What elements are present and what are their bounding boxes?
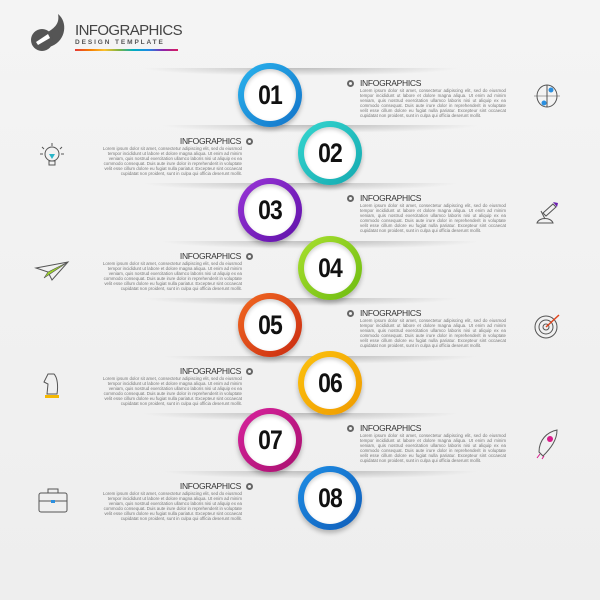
step 07: Lorem ipsum dolor sit amet, consectetur adipiscing elit, sed do eiusmod tempor incididunt ut labore et dolore magna aliqua. Ut enim ad minim veniam, quis nostrud exercitation ullamco laboris nisi ut aliquip ex ea commodo consequat. Duis aute irure dolor in reprehenderit in voluptate velit esse cillum dolore eu fugiat nulla pariatur. Excepteur sint occaecat cupidatat non proident, sunt in culpa qui officia deserunt mollit. [360, 433, 506, 463]
step 07: 07 [258, 425, 282, 455]
logo text: INFOGRAPHICS [75, 22, 182, 39]
icon: rocket [536, 429, 558, 460]
step 07: INFOGRAPHICS [360, 423, 421, 433]
step 03: Lorem ipsum dolor sit amet, consectetur adipiscing elit, sed do eiusmod tempor incididunt ut labore et dolore magna aliqua. Ut enim ad minim veniam, quis nostrud exercitation ullamco laboris nisi ut aliquip ex ea commodo consequat. Duis aute irure dolor in reprehenderit in voluptate velit esse cillum dolore eu fugiat nulla pariatur. Excepteur sint occaecat cupidatat non proident, sunt in culpa qui officia deserunt mollit. [360, 203, 506, 233]
step 08: Lorem ipsum dolor sit amet, consectetur adipiscing elit, sed do eiusmod tempor incididunt ut labore et dolore magna aliqua. Ut enim ad minim veniam, quis nostrud exercitation ullamco laboris nisi ut aliquip ex ea commodo consequat. Duis aute irure dolor in reprehenderit in voluptate velit esse cillum dolore eu fugiat nulla pariatur. Excepteur sint occaecat cupidatat non proident, sunt in culpa qui officia deserunt mollit. [103, 491, 242, 521]
icon: briefcase [38, 488, 68, 512]
logo: DESIGN TEMPLATE [75, 39, 165, 46]
step 07 [236, 408, 506, 478]
step 04: Lorem ipsum dolor sit amet, consectetur adipiscing elit, sed do eiusmod tempor incididunt ut labore et dolore magna aliqua. Ut enim ad minim veniam, quis nostrud exercitation ullamco laboris nisi ut aliquip ex ea commodo consequat. Duis aute irure dolor in reprehenderit in voluptate velit esse cillum dolore eu fugiat nulla pariatur. Excepteur sint occaecat cupidatat non proident, sunt in culpa qui officia deserunt mollit. [103, 261, 242, 291]
step 05: INFOGRAPHICS [360, 308, 421, 318]
step 02 [103, 121, 364, 190]
step 06: Lorem ipsum dolor sit amet, consectetur adipiscing elit, sed do eiusmod tempor incididunt ut labore et dolore magna aliqua. Ut enim ad minim veniam, quis nostrud exercitation ullamco laboris nisi ut aliquip ex ea commodo consequat. Duis aute irure dolor in reprehenderit in voluptate velit esse cillum dolore eu fugiat nulla pariatur. Excepteur sint occaecat cupidatat non proident, sunt in culpa qui officia deserunt mollit. [103, 376, 242, 406]
step 06: INFOGRAPHICS [180, 366, 241, 376]
step 08: INFOGRAPHICS [180, 481, 241, 491]
step 03: INFOGRAPHICS [360, 193, 421, 203]
step 01: INFOGRAPHICS [360, 78, 421, 88]
step 01: 01 [258, 80, 282, 110]
icon: microscope [536, 202, 558, 224]
icon: brain [534, 84, 560, 108]
step 08: 08 [318, 483, 342, 513]
step 05: 05 [258, 310, 282, 340]
step 02: INFOGRAPHICS [180, 136, 241, 146]
step 05 [236, 293, 506, 362]
step 03: 03 [258, 195, 282, 225]
icon: chess knight [43, 374, 59, 398]
icon: target [534, 314, 560, 338]
step 04: INFOGRAPHICS [180, 251, 241, 261]
step 08 [103, 466, 364, 536]
step 05: Lorem ipsum dolor sit amet, consectetur adipiscing elit, sed do eiusmod tempor incididunt ut labore et dolore magna aliqua. Ut enim ad minim veniam, quis nostrud exercitation ullamco laboris nisi ut aliquip ex ea commodo consequat. Duis aute irure dolor in reprehenderit in voluptate velit esse cillum dolore eu fugiat nulla pariatur. Excepteur sint occaecat cupidatat non proident, sunt in culpa qui officia deserunt mollit. [360, 318, 506, 348]
step 06: 06 [318, 368, 342, 398]
step 04: 04 [318, 253, 342, 283]
step 03 [236, 178, 506, 248]
step 02: 02 [318, 138, 342, 168]
logo [31, 14, 182, 51]
step 01 [236, 63, 506, 132]
icon: paper plane [34, 261, 70, 281]
step 01: Lorem ipsum dolor sit amet, consectetur adipiscing elit, sed do eiusmod tempor incididunt ut labore et dolore magna aliqua. Ut enim ad minim veniam, quis nostrud exercitation ullamco laboris nisi ut aliquip ex ea commodo consequat. Duis aute irure dolor in reprehenderit in voluptate velit esse cillum dolore eu fugiat nulla pariatur. Excepteur sint occaecat cupidatat non proident, sunt in culpa qui officia deserunt mollit. [360, 88, 506, 118]
step 02: Lorem ipsum dolor sit amet, consectetur adipiscing elit, sed do eiusmod tempor incididunt ut labore et dolore magna aliqua. Ut enim ad minim veniam, quis nostrud exercitation ullamco laboris nisi ut aliquip ex ea commodo consequat. Duis aute irure dolor in reprehenderit in voluptate velit esse cillum dolore eu fugiat nulla pariatur. Excepteur sint occaecat cupidatat non proident, sunt in culpa qui officia deserunt mollit. [103, 146, 242, 176]
step 06 [103, 351, 364, 420]
icon: logo mark [31, 14, 64, 51]
step 04 [103, 236, 364, 306]
icon: bulb [40, 143, 64, 166]
